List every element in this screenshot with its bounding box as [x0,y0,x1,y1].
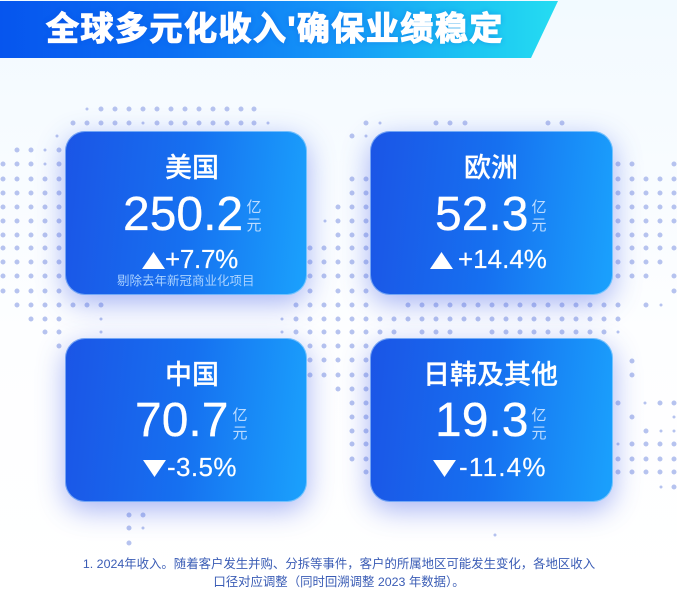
banner background [0,1,558,58]
panel: 日韩及其他 [370,338,613,502]
region name: 美国 [165,153,219,183]
panel: 欧洲 [370,131,613,295]
growth rate: +14.4% [458,244,547,274]
revenue value: 250.2 [123,188,243,241]
unit: 亿元 [232,407,248,442]
note: 剔除去年新冠商业化项目 [117,274,255,288]
panel: 中国 [65,338,307,502]
icon: up triangle [430,252,453,269]
unit: 亿元 [246,199,262,234]
growth rate: -11.4% [459,452,547,482]
panel: 美国 [65,131,307,295]
title text: 全球多元化收入'确保业绩稳定 [46,10,504,47]
revenue value: 70.7 [135,394,228,447]
footnote: 1. 2024年收入。随着客户发生并购、分拆等事件，客户的所属地区可能发生变化，各地区收入 [83,557,595,571]
title banner [0,1,558,58]
region name: 中国 [165,360,219,390]
icon: down triangle [143,460,166,477]
icon: down triangle [433,460,456,477]
revenue value: 19.3 [435,394,528,447]
growth rate: -3.5% [167,452,237,482]
region name: 日韩及其他 [423,360,558,390]
revenue value: 52.3 [435,188,528,241]
region name: 欧洲 [464,153,518,183]
unit: 亿元 [531,407,546,442]
footnote: 口径对应调整（同时回溯调整 2023 年数据）。 [213,575,465,589]
footnote [83,557,595,589]
growth rate: +7.7% [165,244,238,274]
unit: 亿元 [531,199,546,234]
icon: up triangle [142,252,165,269]
